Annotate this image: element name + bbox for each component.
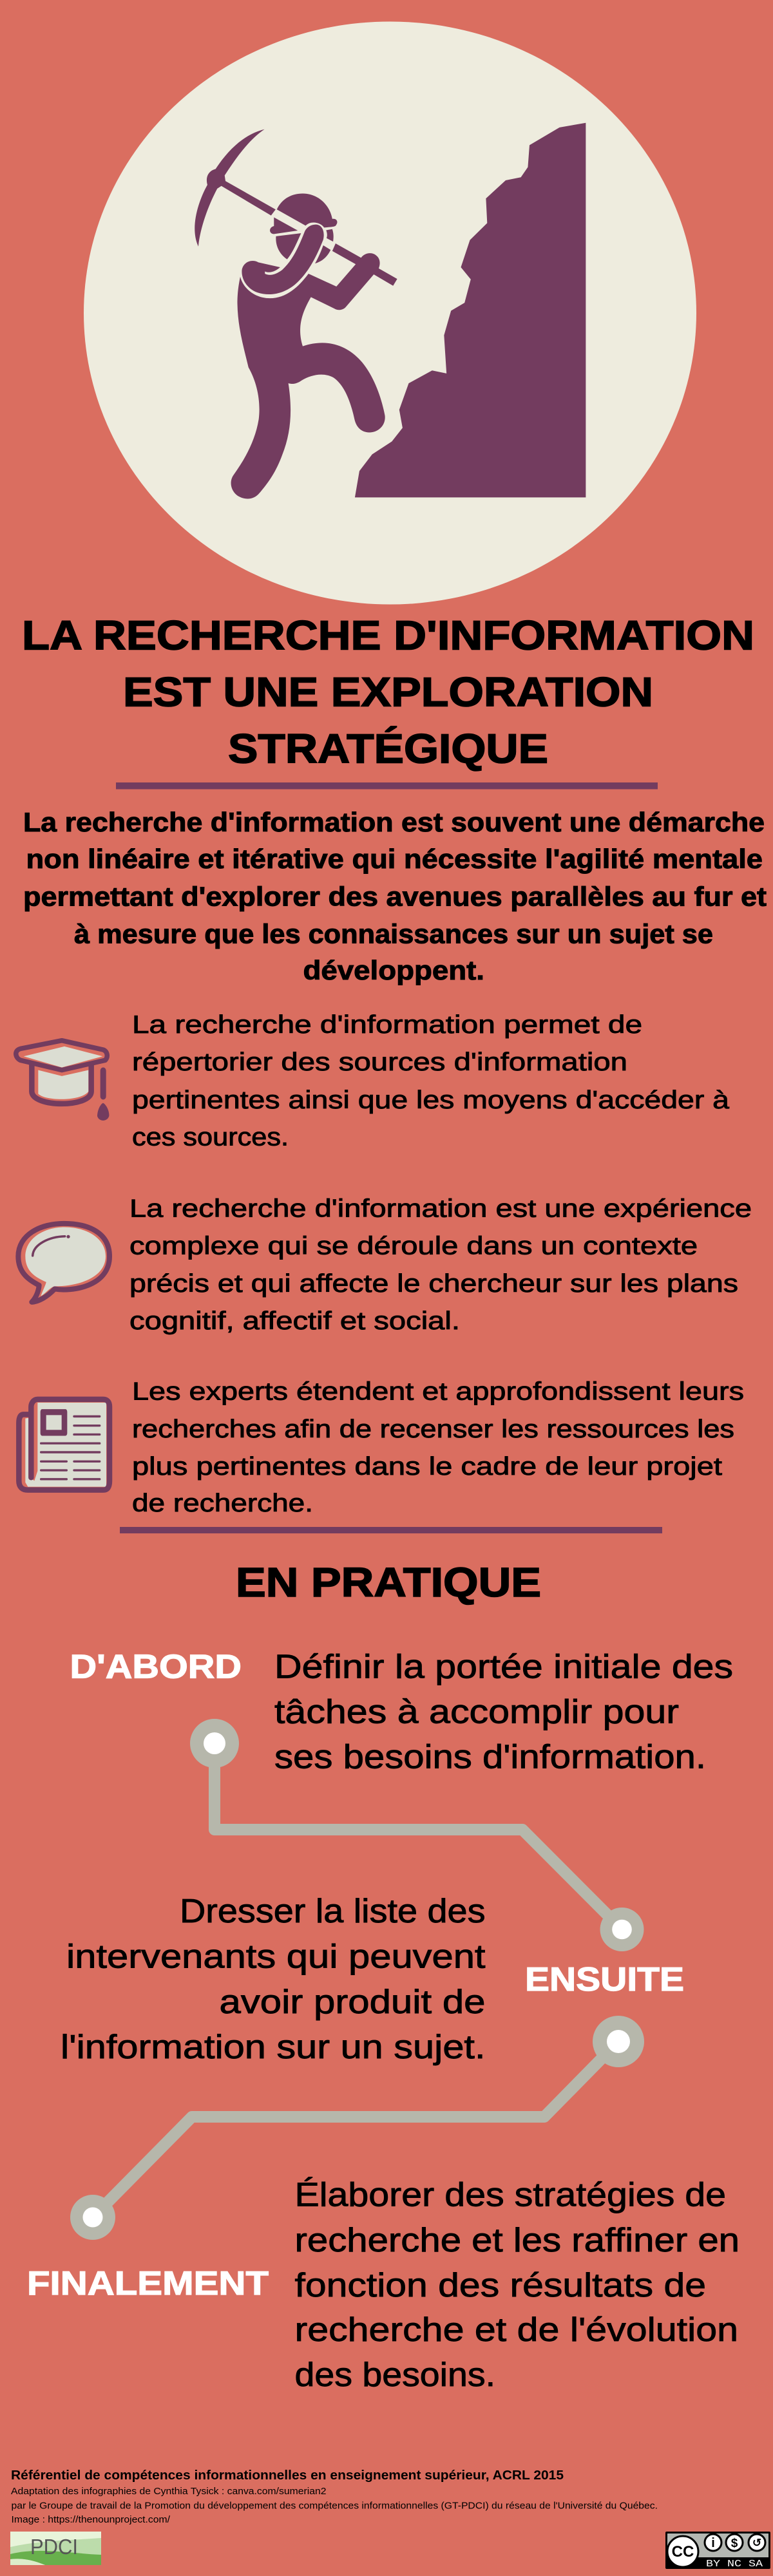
text block: sources: La recherche d'information permet de bbox=[132, 1011, 642, 1039]
text block: experience: complexe qui se déroule dans un contexte bbox=[129, 1233, 698, 1260]
title: LA RECHERCHE D'INFORMATION bbox=[22, 612, 754, 658]
logo: Creative Commons BY-NC-SA badge bbox=[665, 2532, 770, 2570]
title bbox=[22, 612, 754, 772]
text block: step 3: recherche et les raffiner en bbox=[295, 2222, 740, 2259]
pickaxe head bbox=[195, 129, 276, 247]
cliff bbox=[355, 123, 586, 497]
heading: en pratique: EN PRATIQUE bbox=[236, 1559, 541, 1605]
icon: climber and cliff bbox=[195, 123, 586, 498]
text block: step 1: tâches à accomplir pour bbox=[274, 1694, 679, 1731]
text block: step 2 bbox=[61, 1893, 486, 2066]
text block: step 3: Élaborer des stratégies de bbox=[295, 2177, 726, 2214]
lead paragraph: développent. bbox=[303, 955, 484, 985]
footer credits: par le Groupe de travail de la Promotion du développement des compétences informationnelles (GT-PDCI) du réseau de l'Université du Québec. bbox=[12, 2500, 658, 2512]
text block: step 1: ses besoins d'information. bbox=[274, 1739, 706, 1776]
label: ensuite: ENSUITE bbox=[525, 1961, 684, 1998]
text block: sources: ces sources. bbox=[132, 1123, 289, 1151]
face bbox=[270, 218, 334, 263]
label: finalement: FINALEMENT bbox=[27, 2265, 269, 2302]
title: STRATÉGIQUE bbox=[228, 725, 548, 772]
logo: Creative Commons BY-NC-SA badge: CC bbox=[672, 2543, 694, 2561]
text block: experience: précis et qui affecte le chercheur sur les plans bbox=[129, 1270, 738, 1298]
text block: step 1 bbox=[274, 1649, 733, 1776]
logo: PDCI bbox=[10, 2532, 101, 2565]
text block: sources: pertinentes ainsi que les moyens d'accéder à bbox=[132, 1086, 729, 1114]
footer credits bbox=[11, 2468, 658, 2525]
logo: PDCI: PDCI bbox=[30, 2535, 78, 2559]
logo: Creative Commons BY-NC-SA badge: i bbox=[711, 2536, 715, 2550]
lead paragraph bbox=[23, 807, 767, 985]
footer credits: Référentiel de compétences informationnelles en enseignement supérieur, ACRL 2015 bbox=[11, 2468, 564, 2483]
body, legs and rear arm bbox=[231, 243, 397, 498]
cream circle bbox=[84, 22, 696, 604]
hero illustration: climber on a cliff bbox=[84, 22, 696, 604]
text block: step 2: intervenants qui peuvent bbox=[66, 1938, 486, 1976]
lead paragraph: La recherche d'information est souvent une démarche bbox=[23, 807, 765, 837]
text block: experience: La recherche d'information est une expérience bbox=[129, 1195, 752, 1222]
helmet bbox=[277, 194, 337, 227]
text block: step 3: des besoins. bbox=[295, 2356, 495, 2394]
text block: sources bbox=[132, 1011, 729, 1151]
footer credits: Adaptation des infographies de Cynthia Tysick : canva.com/sumerian2 bbox=[11, 2486, 326, 2497]
connector: step 2 to step 3 bbox=[70, 2016, 644, 2240]
text block: step 2: Dresser la liste des bbox=[180, 1893, 486, 1930]
footer credits: Image : https://thenounproject.com/ bbox=[12, 2514, 171, 2525]
text block: experts: de recherche. bbox=[132, 1490, 313, 1517]
text block: step 2: avoir produit de bbox=[219, 1984, 486, 2021]
front arm bbox=[242, 225, 324, 294]
logo: Creative Commons BY-NC-SA badge: ↺ bbox=[752, 2537, 761, 2549]
text block: step 2: l'information sur un sujet. bbox=[61, 2029, 486, 2066]
label: d'abord: D'ABORD bbox=[70, 1649, 242, 1686]
text block: step 1: Définir la portée initiale des bbox=[274, 1649, 733, 1686]
logo: Creative Commons BY-NC-SA badge: $ bbox=[731, 2537, 738, 2550]
text block: experts: recherches afin de recenser les ressources les bbox=[132, 1416, 734, 1443]
lead paragraph: permettant d'explorer des avenues parallèles au fur et bbox=[23, 881, 767, 912]
icon: newspaper bbox=[19, 1399, 110, 1490]
text block: step 3 bbox=[295, 2177, 740, 2394]
icon: speech bubble bbox=[18, 1224, 110, 1302]
text block: experts: plus pertinentes dans le cadre de leur projet bbox=[132, 1453, 722, 1481]
lead paragraph: non linéaire et itérative qui nécessite l'agilité mentale bbox=[26, 844, 763, 874]
logo: Creative Commons BY-NC-SA badge: BY NC SA bbox=[706, 2559, 763, 2570]
text block: step 3: recherche et de l'évolution bbox=[295, 2311, 738, 2349]
lead paragraph: à mesure que les connaissances sur un sujet se bbox=[74, 918, 713, 949]
icon: graduation cap bbox=[16, 1041, 109, 1121]
title: EST UNE EXPLORATION bbox=[123, 668, 653, 715]
connector: step 1 to step 2 bbox=[190, 1719, 644, 1951]
text block: experience: cognitif, affectif et social. bbox=[129, 1307, 460, 1335]
text block: experts: Les experts étendent et approfondissent leurs bbox=[132, 1378, 744, 1405]
text block: experts bbox=[132, 1378, 744, 1517]
text block: step 3: fonction des résultats de bbox=[295, 2267, 706, 2304]
text block: experience bbox=[129, 1195, 752, 1335]
text block: sources: répertorier des sources d'information bbox=[132, 1048, 627, 1076]
